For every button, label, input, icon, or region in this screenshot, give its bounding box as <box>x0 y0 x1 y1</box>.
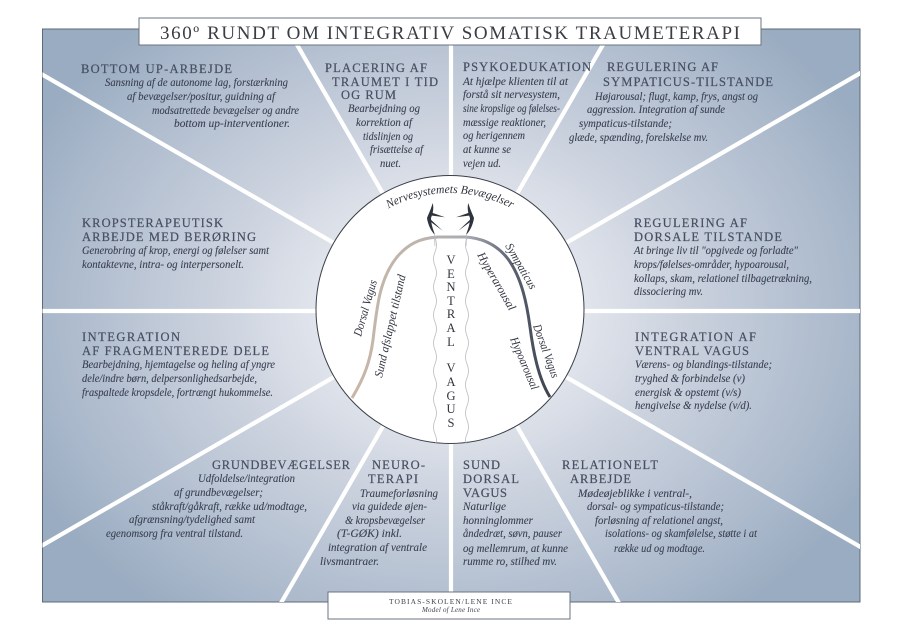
heading: INTEGRATION AF <box>635 330 756 344</box>
nervous system curve <box>352 237 550 398</box>
description: energisk & opstemt (v/s) <box>635 387 741 399</box>
description: dissociering mv. <box>634 286 703 298</box>
description <box>105 77 299 130</box>
heading: BOTTOM UP-ARBEJDE <box>81 62 232 76</box>
description <box>633 245 812 298</box>
description: frisættelse af <box>370 144 425 156</box>
label: sympaticus: Sympaticus <box>502 240 540 292</box>
description: At bringe liv til "opgivede og forladte" <box>633 245 798 257</box>
description <box>320 488 438 568</box>
description: og herigennem <box>463 130 525 142</box>
heading <box>634 216 782 244</box>
label: ventral vagus vertical: S <box>448 416 455 430</box>
description: Traumeforløsning <box>360 488 438 500</box>
description: livsmantraer. <box>320 556 379 568</box>
description <box>569 91 758 144</box>
description: forstå sit nervesystem, <box>463 88 560 101</box>
heading: ARBEJDE <box>570 472 631 486</box>
description: isolations- og skamfølelse, støtte i at <box>605 528 758 540</box>
description: kollaps, skam, relationel tilbagetrækning, <box>634 273 812 285</box>
heading <box>635 330 756 358</box>
icon: left dancer <box>427 203 445 246</box>
footer model credit: Model of Lene Ince <box>421 606 480 614</box>
heading: SUND <box>463 458 500 472</box>
heading <box>463 458 519 500</box>
description: aggression. Integration af sunde <box>587 104 725 116</box>
description: bottom up-interventioner. <box>174 118 290 130</box>
label: ventral vagus vertical: A <box>446 375 456 389</box>
label: ventral vagus vertical: R <box>447 307 456 321</box>
panel: placering af traumet <box>325 61 438 170</box>
label: ventral vagus vertical <box>446 253 456 430</box>
heading: DORSAL <box>463 472 519 486</box>
description: egenomsorg fra ventral tilstand. <box>106 528 243 540</box>
description: dorsal- og sympaticus-tilstande; <box>587 501 724 513</box>
description <box>106 473 307 540</box>
description: At hjælpe klienten til at <box>462 76 569 88</box>
heading <box>603 60 773 89</box>
heading: VENTRAL VAGUS <box>635 344 749 358</box>
description <box>577 488 758 555</box>
heading: DORSALE TILSTANDE <box>634 230 782 244</box>
description: Bearbejdning og <box>348 103 420 115</box>
icon: two dancers <box>427 203 474 246</box>
description: Værens- og blandings-tilstande; <box>635 359 772 371</box>
description: rumme ro, stilhed mv. <box>463 556 557 568</box>
description: af bevægelser/positur, guidning af <box>127 91 277 103</box>
heading: INTEGRATION <box>82 330 180 344</box>
description: (T-GØK) inkl. <box>337 528 402 540</box>
panel: regulering af dorsale tilstande <box>633 216 812 298</box>
description <box>635 359 772 412</box>
description: & kropsbevægelser <box>345 515 425 527</box>
heading: PLACERING AF <box>325 61 427 75</box>
description: mæssige reaktioner, <box>463 117 546 129</box>
heading <box>368 458 425 486</box>
label: ventral vagus vertical: V <box>446 361 456 375</box>
panel: kropsterapeutisk arbejde <box>82 216 270 271</box>
description: række ud og modtage. <box>614 543 705 555</box>
icon: right dancer <box>456 203 474 246</box>
panel: integration af ventral vagus <box>635 330 772 412</box>
description: nuet. <box>380 158 401 170</box>
label: hyperarousal: Hyperarousal <box>474 249 519 313</box>
description: tryghed & forbindelse (v) <box>635 373 745 385</box>
heading: OG RUM <box>341 88 396 102</box>
panel: regulering af sympaticus <box>569 60 773 144</box>
heading: RELATIONELT <box>562 458 658 472</box>
description: Naturlige <box>462 501 506 513</box>
description: Generobring af krop, energi og følelser samt <box>82 245 270 257</box>
central circle diagram <box>316 175 584 444</box>
description: af grundbevægelser; <box>174 487 263 499</box>
heading: NEURO- <box>372 458 425 472</box>
circle <box>316 176 584 444</box>
description: Mødeøjeblikke i ventral-, <box>577 488 692 500</box>
heading: TRAUMET I TID <box>332 75 438 89</box>
description <box>82 359 275 399</box>
heading <box>82 330 269 358</box>
heading: SYMPATICUS-TILSTANDE <box>603 75 773 89</box>
label: ventral vagus vertical: V <box>446 253 456 267</box>
description: og mellemrum, at kunne <box>463 543 568 555</box>
heading: VAGUS <box>463 486 507 500</box>
footer box <box>328 592 570 619</box>
description <box>462 76 569 170</box>
description: forløsning af relationel angst, <box>595 515 723 527</box>
heading: GRUNDBEVÆGELSER <box>212 458 351 472</box>
label: ventral vagus vertical: G <box>446 389 456 403</box>
heading: KROPSTERAPEUTISK <box>82 216 223 230</box>
panel: grundbevægelser <box>106 458 351 540</box>
description: hengivelse & nydelse (v/d). <box>635 400 752 412</box>
title: 360º RUNDT OM INTEGRATIV SOMATISK TRAUMETERAPI <box>160 23 740 44</box>
heading: ARBEJDE MED BERØRING <box>82 230 256 244</box>
description: Højarousal; flugt, kamp, frys, angst og <box>594 91 758 103</box>
label: ventral vagus vertical: N <box>446 280 456 294</box>
description <box>82 245 270 271</box>
heading: TERAPI <box>368 472 418 486</box>
heading: PSYKOEDUKATION <box>463 60 591 74</box>
label: hypoarousal: Hypoarousal <box>507 334 542 392</box>
heading <box>82 216 256 244</box>
description: honninglommer <box>463 515 533 527</box>
heading: REGULERING AF <box>607 60 718 74</box>
panel: bottom up-arbejde <box>81 62 299 130</box>
label: sund afslappet tilstand: Sund afslappet tilstand <box>371 272 409 379</box>
description: fraspaltede kropsdele, fortrængt hukommelse. <box>82 387 273 399</box>
heading: AF FRAGMENTEREDE DELE <box>82 344 269 358</box>
label: ventral vagus vertical: A <box>446 321 456 335</box>
panel: relationelt arbejde <box>562 458 758 555</box>
description: kontaktevne, intra- og interpersonelt. <box>82 259 244 271</box>
description: sine kropslige og følelses- <box>463 103 560 115</box>
description: korrektion af <box>356 117 414 129</box>
description: ståkraft/gåkraft, række ud/modtage, <box>152 500 307 513</box>
description: Bearbejdning, hjemtagelse og heling af yngre <box>82 359 275 371</box>
heading: REGULERING AF <box>634 216 747 230</box>
label: ventral vagus vertical: E <box>447 267 455 281</box>
description: modsatrettede bevægelser og andre <box>152 105 299 117</box>
label: ventral vagus vertical: T <box>447 294 455 308</box>
description: integration af ventrale <box>328 542 427 554</box>
label: dorsal vagus left: Dorsal Vagus <box>350 278 380 339</box>
heading <box>562 458 658 486</box>
label: nervesystemets bevægelser: Nervesystemets Bevægelser <box>386 186 514 208</box>
description: krops/følelses-områder, hypoarousal, <box>634 258 789 271</box>
description <box>462 501 568 568</box>
label: ventral vagus vertical: U <box>446 402 456 416</box>
description: åndedræt, søvn, pauser <box>463 527 562 540</box>
description: Sansning af de autonome lag, forstærkning <box>105 77 288 89</box>
label: ventral vagus vertical: L <box>447 335 455 349</box>
description: glæde, spænding, forelskelse mv. <box>569 132 708 144</box>
panel: psykoedukation <box>462 60 591 170</box>
panel: neuroterapi <box>320 458 438 568</box>
panel: sund dorsal vagus <box>462 458 568 568</box>
description <box>348 103 425 170</box>
footer credit: TOBIAS-SKOLEN/LENE INCE <box>389 597 512 606</box>
label: dorsal vagus right: Dorsal Vagus <box>530 321 563 380</box>
title box <box>139 18 761 45</box>
description: at kunne se <box>463 144 511 156</box>
panel: integration af fragmenterede dele <box>82 330 275 399</box>
description: afgrænsning/tydelighed samt <box>129 514 256 526</box>
description: Udfoldelse/integration <box>198 473 295 485</box>
description: sympaticus-tilstande; <box>579 118 672 130</box>
description: vejen ud. <box>463 158 501 170</box>
description: dele/indre børn, delpersonlighedsarbejde, <box>82 373 257 385</box>
ventral vagus wavy boundaries <box>434 238 468 444</box>
heading <box>325 61 438 102</box>
description: via guidede øjen- <box>352 501 427 513</box>
description: tidslinjen og <box>363 131 413 143</box>
